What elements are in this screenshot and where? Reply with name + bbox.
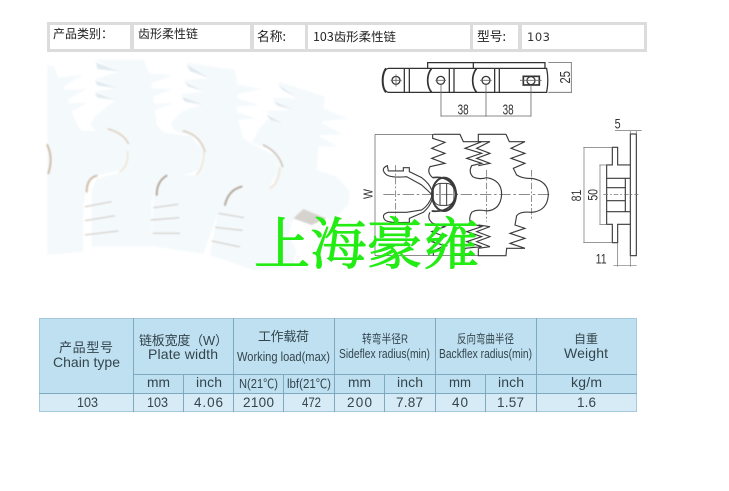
right link outline xyxy=(478,134,548,256)
table data row: 1.57 xyxy=(497,395,524,410)
dimension labels: 38 xyxy=(458,102,469,118)
drawing: plan view of chain links xyxy=(361,134,550,256)
table unit row: inch xyxy=(498,374,524,390)
dimension labels: 25 xyxy=(558,71,574,84)
side view dimension labels: 50 xyxy=(585,189,601,201)
table unit row: mm xyxy=(348,374,371,390)
specification table xyxy=(39,318,637,412)
table data row: 2100 xyxy=(243,395,274,410)
table data row: 200 xyxy=(347,395,372,410)
green company watermark: 上海豪雍 xyxy=(254,215,479,277)
table header labels: Sideflex radius(min) xyxy=(339,347,430,361)
table header labels: Chain type xyxy=(53,354,120,370)
table data row: 7.87 xyxy=(396,395,423,410)
table data row xyxy=(77,395,596,410)
table data row: 40 xyxy=(452,395,468,410)
side view dimension labels: 11 xyxy=(596,251,607,267)
drawing: side view of chain with dimensions xyxy=(568,115,642,267)
table header labels: 反向弯曲半径 xyxy=(457,331,514,346)
table data row: 472 xyxy=(302,395,321,410)
drawing: top view of chain link with dimensions xyxy=(383,63,574,118)
table unit row: lbf(21℃) xyxy=(287,377,331,391)
table data row: 103 xyxy=(77,395,98,410)
drawing: plan view of chain links: W xyxy=(361,189,376,199)
left link teeth xyxy=(429,134,445,256)
middle link outline xyxy=(433,134,502,256)
fork arms xyxy=(383,166,432,223)
product photo: white plastic flex chain xyxy=(47,60,350,270)
header info table xyxy=(47,22,647,52)
side view dimension labels: 81 xyxy=(568,189,584,201)
table header labels: 链板宽度（W） xyxy=(139,333,228,348)
header info table: 103齿形柔性链 xyxy=(313,28,396,45)
table header labels: Backflex radius(min) xyxy=(439,347,532,361)
dimension labels xyxy=(458,71,574,118)
header info table: 产品类别： xyxy=(53,25,113,42)
table header labels: 产品型号 xyxy=(59,340,113,355)
table unit row: inch xyxy=(196,374,222,390)
table header labels: Plate width xyxy=(148,346,218,362)
table unit row xyxy=(147,374,602,391)
chain link 3 (middle) xyxy=(152,62,278,254)
side view dimension labels: 5 xyxy=(615,115,621,131)
chain link 4 (right) xyxy=(210,81,350,270)
chain link 1 (left) xyxy=(47,65,128,255)
table data row: 1.6 xyxy=(577,395,596,410)
table header labels xyxy=(53,329,608,370)
dimension labels: 38 xyxy=(503,102,514,118)
table header labels: 工作载荷 xyxy=(258,329,309,344)
table header labels: Weight xyxy=(564,345,608,361)
tooth gap lines xyxy=(85,202,244,247)
table data row: 4.06 xyxy=(194,395,223,410)
header info table: 103 xyxy=(527,30,550,44)
table unit row: inch xyxy=(397,374,423,390)
table header labels: Working load(max) xyxy=(237,349,330,364)
table unit row: mm xyxy=(449,374,471,390)
table data row: 103 xyxy=(147,395,168,410)
table header labels: 自重 xyxy=(574,332,598,346)
table unit row: mm xyxy=(147,374,170,390)
header info table: 型号: xyxy=(477,26,506,45)
table header labels: 转弯半径R xyxy=(362,331,408,346)
header info table: 名称: xyxy=(257,26,286,45)
chain link 2 xyxy=(90,60,203,247)
table unit row: kg/m xyxy=(571,374,602,390)
side view dimension labels xyxy=(568,115,621,267)
table unit row: N(21℃) xyxy=(239,377,278,391)
joint shadows xyxy=(47,129,283,205)
header info table: 齿形柔性链 xyxy=(138,25,198,42)
